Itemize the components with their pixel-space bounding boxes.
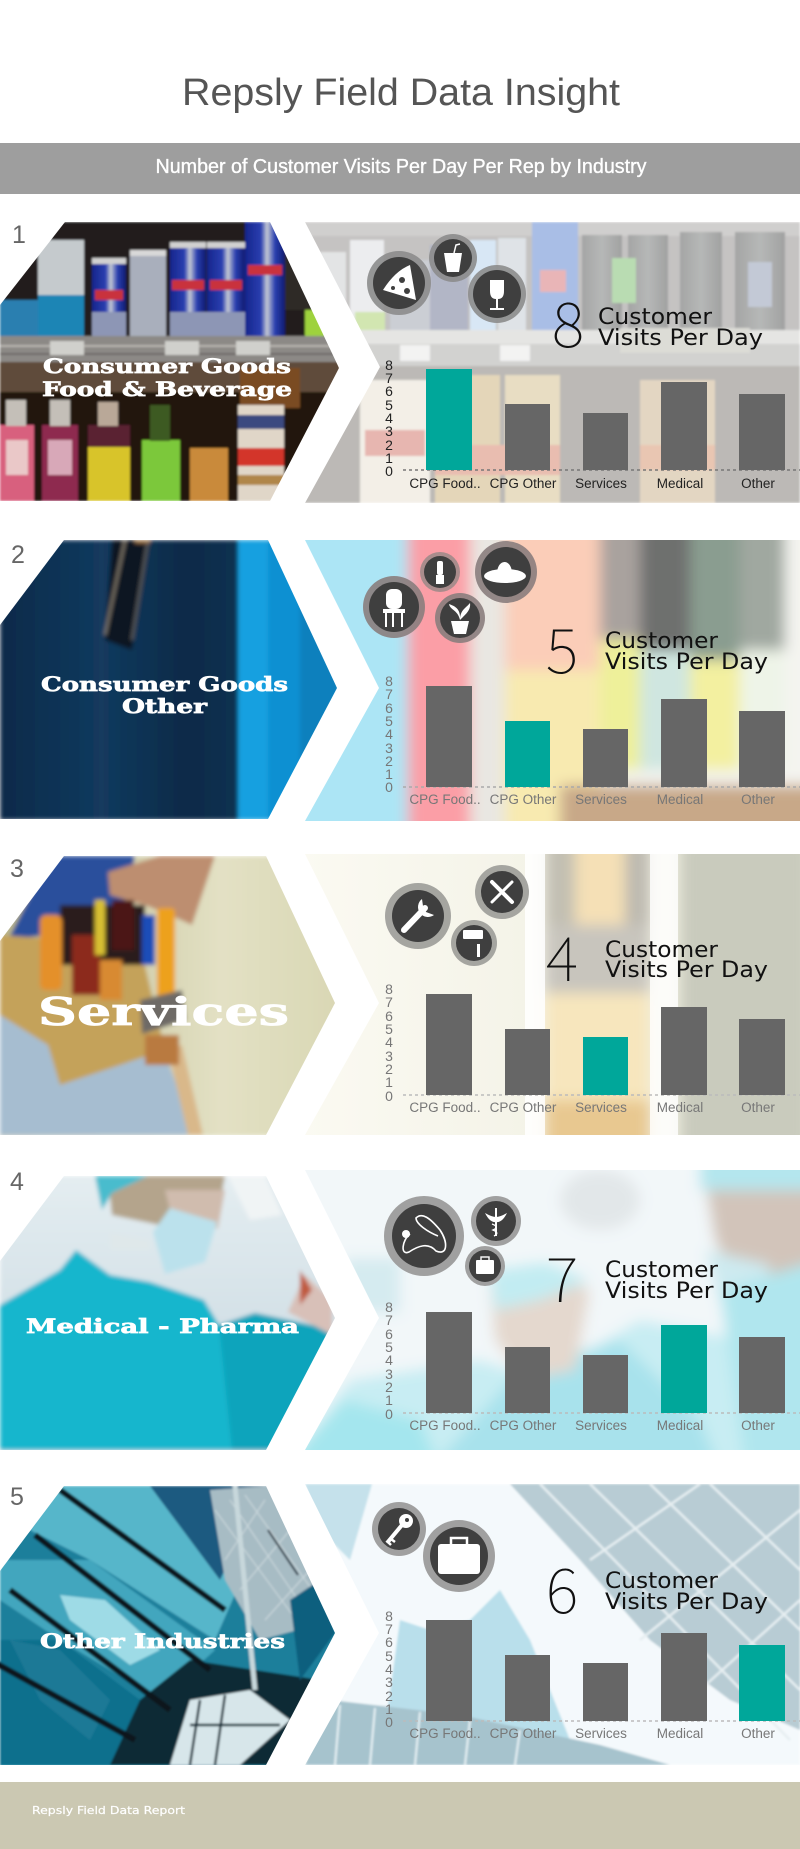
bar chart: Services [575,476,627,491]
panel heading: Other [122,694,208,718]
bar chart: Medical [657,1418,703,1433]
bar chart: 4 [385,410,393,426]
bar chart: Medical [657,476,703,491]
photo: interior faded [305,854,800,1135]
panel 3: services [0,854,800,1135]
bar chart: 8 [385,357,393,373]
bar chart: CPG Other [490,1418,557,1433]
subtitle band: Number of Customer Visits Per Day Per Rep by Industry [156,156,646,178]
big number 6: 6 [546,1541,578,1631]
panel heading: Consumer Goods [43,354,291,378]
bar chart: 6 [385,383,393,399]
footer: Repsly Field Data Report [32,1804,186,1817]
bar chart: 7 [385,994,393,1010]
photo: drink shelves [0,222,340,501]
caption: Customer [605,1568,719,1594]
bar chart: 1 [385,1392,393,1408]
number 3: 3 [10,855,24,883]
caption [605,1568,768,1615]
bar chart: Other [741,1100,775,1115]
panel heading [41,672,288,718]
caption: Customer [598,304,713,330]
bar chart: 0 [385,779,393,795]
bar chart: 6 [385,1008,393,1024]
bar chart: CPG Food.. [409,1418,481,1433]
bar chart: 4 [385,1661,393,1677]
bar chart: 3 [385,1048,393,1064]
bar chart: CPG Food.. [409,792,481,807]
panel 5: other industries [0,1483,800,1766]
bar chart: 7 [385,370,393,386]
bar chart: CPG Food.. [409,1100,481,1115]
big number 5: 5 [546,601,578,691]
bar chart: Other [741,476,775,491]
bar chart [385,673,800,807]
photo: clothing rack faded [305,540,800,821]
panel 2: consumer goods other [0,540,800,821]
bar chart: 0 [385,1714,393,1730]
photo: glass building [0,1486,340,1766]
bar chart: 4 [385,726,393,742]
bar chart: Other [741,1418,775,1433]
bar chart: 2 [385,1061,393,1077]
panel heading: Food & Beverage [42,377,292,401]
bar chart: Other [741,1726,775,1741]
panel 4: medical pharma [0,1170,800,1450]
bar chart: Services [575,1100,627,1115]
bar chart: Medical [657,1100,703,1115]
number 5: 5 [10,1483,24,1511]
bar chart: 7 [385,1312,393,1328]
icon: chair [363,576,425,638]
panel heading: Other Industries [40,1629,285,1653]
icon: hat [475,541,537,603]
caption: Customer [605,628,719,654]
bar chart: 3 [385,1366,393,1382]
caption: Visits Per Day [605,649,768,675]
bar chart: 2 [385,1688,393,1704]
bar chart: 5 [385,397,393,413]
icon: pizza [367,251,431,315]
bar chart: 2 [385,753,393,769]
icon: small case [465,1246,505,1286]
bar chart: 6 [385,1634,393,1650]
bar chart: 2 [385,1379,393,1395]
icon: paint roller [451,920,497,966]
bar chart: 3 [385,740,393,756]
bar chart: 5 [385,1021,393,1037]
icon cluster: medical [384,1196,521,1286]
bar chart: 3 [385,423,393,439]
panel heading: Medical - Pharma [26,1314,299,1338]
caption: Visits Per Day [605,957,768,983]
photo: surgeon [0,1176,340,1451]
number 4: 4 [10,1168,24,1196]
caption: Visits Per Day [605,1278,768,1304]
number 1: 1 [12,221,26,249]
icon cluster: business [372,1502,495,1592]
bar chart: CPG Food.. [409,1726,481,1741]
icon cluster: tools [385,865,529,966]
photo: tool belt [0,856,340,1136]
bar chart: 5 [385,713,393,729]
bar chart: 1 [385,1074,393,1090]
big number 7: 7 [546,1230,578,1320]
bar chart: 8 [385,1299,393,1315]
bar chart: Services [575,1726,627,1741]
bar chart [385,981,800,1115]
bar chart: CPG Other [490,476,557,491]
bar chart: CPG Other [490,1100,557,1115]
bar chart: 7 [385,686,393,702]
icon: key [372,1502,426,1556]
caption: Visits Per Day [605,1589,768,1615]
bar chart: Medical [657,1726,703,1741]
bar chart: CPG Food.. [409,476,481,491]
bar chart: Other [741,792,775,807]
icon cluster: food and drink [367,234,526,323]
bar chart: 6 [385,700,393,716]
bar chart [385,1608,800,1741]
photo: drink shelves faded [300,222,800,503]
bar chart: Medical [657,792,703,807]
bar chart: 6 [385,1326,393,1342]
caption [605,628,768,675]
bar chart: CPG Other [490,792,557,807]
bar chart: 5 [385,1648,393,1664]
title: Repsly Field Data Insight [182,72,620,114]
caption: Customer [605,1257,719,1283]
bar chart: 4 [385,1352,393,1368]
photo: operating room faded [305,1170,800,1450]
icon: lipstick [420,552,460,592]
icon: drink [429,234,477,282]
number 2: 2 [11,541,25,569]
icon cluster: consumer products [363,541,537,643]
bar chart: 3 [385,1674,393,1690]
photo: navy jackets [0,540,340,820]
footer [0,1782,800,1849]
bar chart: Services [575,1418,627,1433]
bar chart: 8 [385,981,393,997]
bar chart [385,357,800,491]
bar chart: 5 [385,1339,393,1355]
bar chart: 0 [385,1088,393,1104]
icon: screwdriver and wrench [475,865,529,919]
icon: briefcase [423,1520,495,1592]
caption [605,1257,768,1304]
panel heading: Services [38,989,289,1034]
bar chart: CPG Other [490,1726,557,1741]
bar chart: 2 [385,437,393,453]
icon: wine glass [468,265,526,323]
bar chart: 8 [385,1608,393,1624]
bar chart: 1 [385,450,393,466]
caption: Customer [605,937,719,963]
bar chart [385,1299,800,1433]
icon: caduceus [471,1196,521,1246]
bar chart: 0 [385,1406,393,1422]
bar chart: 1 [385,766,393,782]
bar chart: 1 [385,1701,393,1717]
bar chart: 0 [385,463,393,479]
big number 8: 8 [552,275,584,365]
panel heading: Consumer Goods [41,672,288,696]
icon: wrench [385,883,451,949]
bar chart: 4 [385,1034,393,1050]
big number 4: 4 [546,909,578,999]
caption: Visits Per Day [598,325,763,351]
caption [605,937,768,983]
subtitle band [0,143,800,194]
panel heading [42,354,292,401]
icon: stethoscope [384,1196,464,1276]
bar chart: 7 [385,1621,393,1637]
panel 1: consumer goods food and beverage [0,221,800,503]
bar chart: 8 [385,673,393,689]
caption [598,304,763,351]
photo: skyscrapers faded [300,1484,800,1765]
icon: plant [435,593,485,643]
bar chart: Services [575,792,627,807]
